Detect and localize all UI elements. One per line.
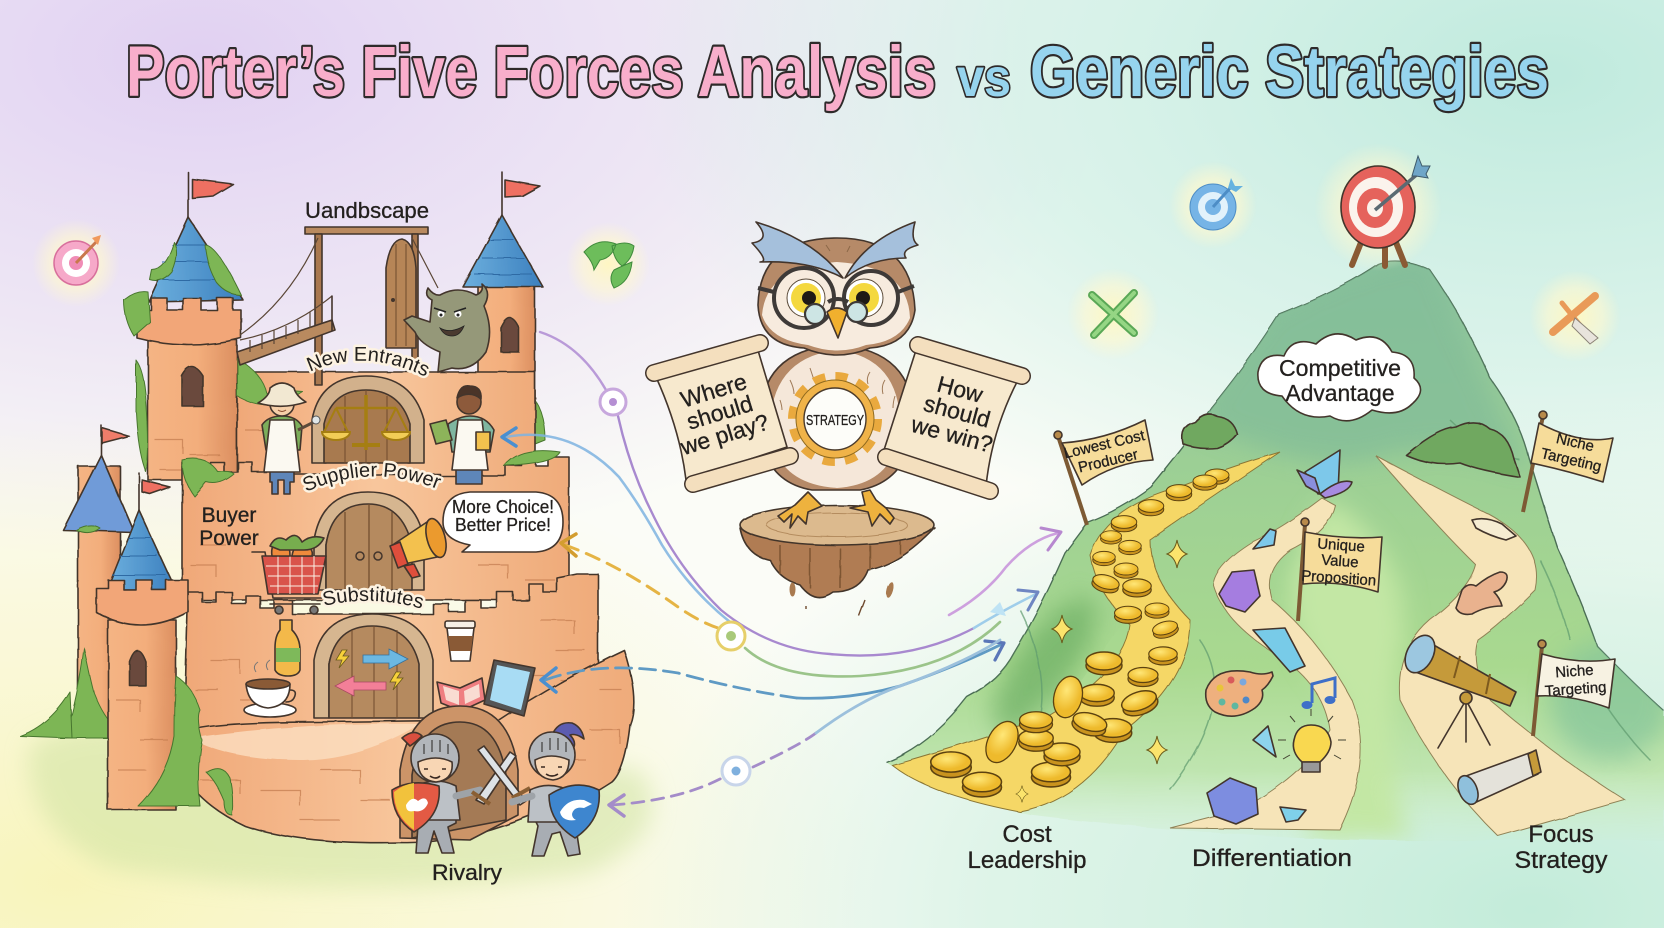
wooden double door	[314, 492, 424, 590]
flag: niche targeting lower: Targeting	[1544, 679, 1607, 700]
big standing coins	[979, 673, 1087, 768]
icon: shopping cart	[252, 535, 326, 614]
third tier wall	[184, 574, 598, 735]
strategy gear: STRATEGY	[806, 412, 864, 429]
focus path	[1376, 456, 1625, 836]
owl feather brows	[752, 222, 843, 278]
owl mascot	[654, 222, 1022, 616]
flag: lowest cost producer: Producer	[1077, 446, 1140, 476]
icon: lightning bolts	[336, 650, 403, 690]
mountain shading	[976, 250, 1664, 838]
speech bubble	[443, 492, 563, 552]
mountain ridge line	[886, 261, 1664, 762]
flag: niche targeting lower	[1533, 640, 1615, 736]
title: vs	[957, 48, 1011, 108]
icon: green leaves	[566, 222, 650, 306]
icon: light bulb	[1278, 709, 1346, 772]
bush left	[1182, 414, 1237, 448]
arrow: green curve	[745, 622, 1000, 676]
flag: unique value proposition: Value	[1321, 552, 1359, 571]
rivalry archway	[400, 706, 518, 840]
mountain body	[886, 250, 1664, 841]
drawbridge and gate frame	[237, 227, 438, 385]
icon: music notes	[1312, 678, 1335, 703]
owl glasses	[758, 268, 914, 328]
arrow: blue to upper castle	[502, 428, 730, 622]
force label: substitutes: Substitutes	[320, 584, 426, 608]
castle towers and walls	[20, 172, 634, 843]
gem: big indigo	[1207, 778, 1258, 824]
differentiation path	[1170, 498, 1361, 830]
castle ground	[29, 725, 652, 888]
owl body	[760, 345, 914, 490]
panel: five forces castle	[20, 171, 692, 894]
gem: blue diamond	[1253, 628, 1305, 672]
right scroll	[884, 345, 1022, 491]
sparkles	[1016, 540, 1187, 802]
flag: niche targeting upper: Targeting	[1539, 445, 1603, 476]
left scroll: Where	[677, 368, 750, 413]
right scroll: we win?	[908, 411, 996, 458]
back tower	[78, 466, 120, 736]
title: Generic Strategies	[1030, 33, 1549, 112]
flag: niche targeting upper	[1523, 411, 1613, 512]
icon: orange cross tools	[1529, 270, 1621, 362]
right tower	[478, 286, 535, 440]
strategy label: cost leadership	[968, 821, 1086, 874]
knight: left	[392, 732, 480, 853]
icon: juice bottle	[275, 620, 300, 676]
icon: blue target	[1169, 161, 1257, 249]
icon: green cross	[1067, 268, 1159, 360]
cloud: competitive advantage: Competitive	[1279, 355, 1401, 381]
flag: lowest cost producer	[1054, 420, 1153, 525]
strategy label: focus strategy: Focus	[1528, 821, 1594, 848]
force label: buyer power	[199, 504, 259, 550]
owl head	[758, 238, 915, 355]
left scroll	[654, 343, 790, 484]
knight: right	[512, 723, 599, 856]
second tier wall	[182, 457, 569, 600]
title: Porter’s Five Forces Analysis	[126, 33, 936, 112]
left scroll: we play?	[676, 409, 772, 460]
arrows: forces to strategies	[502, 332, 1061, 816]
arrow: blue dashed two-way	[541, 641, 1004, 698]
icon: telescope	[1399, 630, 1516, 748]
crossed swords	[472, 746, 530, 805]
base rounded wall	[180, 650, 634, 843]
arrow: purple dashed rivalry	[609, 640, 1000, 816]
flag: unique value proposition: Unique	[1317, 535, 1365, 556]
strategy label: focus strategy: Strategy	[1514, 847, 1608, 874]
red target on summit	[1314, 143, 1442, 271]
top tier wall	[237, 372, 535, 480]
speech bubble: Better Price!	[455, 514, 551, 535]
sign: landscape: Uandbscape	[305, 198, 429, 223]
right scroll: How	[934, 371, 986, 408]
owl talons	[778, 490, 894, 528]
strategy label: focus strategy	[1514, 821, 1608, 874]
force label: buyer power: Power	[199, 527, 259, 550]
force label: supplier power: Supplier Power	[300, 460, 444, 493]
icon: paint palette	[1206, 671, 1273, 716]
gem: pale blue shard	[1253, 726, 1276, 757]
monster: new entrant	[404, 284, 490, 372]
flag: lowest cost producer: Lowest Cost	[1062, 427, 1147, 462]
left scroll: should	[683, 390, 756, 435]
gem: tiny shard	[1280, 807, 1306, 822]
character: merchant supplier	[430, 386, 494, 484]
coins	[931, 469, 1229, 797]
coin path	[892, 452, 1280, 812]
arrow: purple threat curve	[540, 332, 974, 656]
owl eyes	[787, 279, 883, 317]
gem: top crystal	[1297, 450, 1352, 498]
arrow: blue head to cost path	[974, 590, 1038, 628]
flag: unique value proposition	[1298, 518, 1382, 621]
gems and tools along path	[1206, 519, 1516, 824]
bush right	[1406, 422, 1520, 477]
gem: small blue	[1253, 529, 1276, 549]
icon: pink arrow left	[335, 676, 386, 696]
arrow: pink to lowest cost	[949, 528, 1061, 615]
flag: niche targeting lower: Niche	[1555, 662, 1594, 681]
owl beak	[827, 308, 847, 338]
icon: megaphone	[390, 516, 450, 578]
icon: blue arrow right	[363, 649, 408, 669]
arrow: gold dashed	[561, 534, 745, 650]
right scroll: should	[921, 390, 993, 433]
icon: open book	[437, 678, 485, 711]
character: farmer supplier	[258, 383, 320, 494]
cloud: competitive advantage	[1258, 334, 1421, 421]
panel: strategy mountain	[886, 143, 1664, 874]
cloud: competitive advantage: Advantage	[1286, 380, 1394, 406]
strategy label: differentiation: Differentiation	[1192, 845, 1352, 872]
icon: takeaway cup	[445, 621, 475, 661]
shield: blue	[549, 785, 599, 838]
speech bubble: More Choice!	[452, 496, 554, 517]
flag: unique value proposition: Proposition	[1301, 567, 1377, 590]
substitutes door with arrows	[314, 614, 433, 718]
strategy label: cost leadership: Leadership	[968, 847, 1086, 874]
focus path landmarks	[1472, 519, 1516, 540]
gem: purple	[1219, 570, 1260, 612]
front tower	[108, 620, 176, 810]
icon: coffee cup	[244, 660, 296, 717]
strategy label: cost leadership: Cost	[1002, 821, 1052, 848]
icon: pink target	[32, 219, 120, 307]
strategy gear	[793, 377, 877, 461]
flag: niche targeting upper: Niche	[1555, 430, 1596, 455]
title	[126, 33, 1549, 112]
scales gate	[312, 376, 424, 463]
big left tower	[148, 340, 237, 480]
force label: new entrants: New Entrants	[304, 344, 431, 378]
icon: rolled map tube	[1454, 750, 1541, 807]
force label: rivalry: Rivalry	[432, 860, 502, 885]
icon: tablet	[484, 660, 535, 716]
force label: buyer power: Buyer	[202, 504, 256, 527]
floating stump	[740, 505, 935, 616]
shield: red and yellow	[392, 783, 439, 832]
icon: balance scales	[322, 395, 410, 450]
